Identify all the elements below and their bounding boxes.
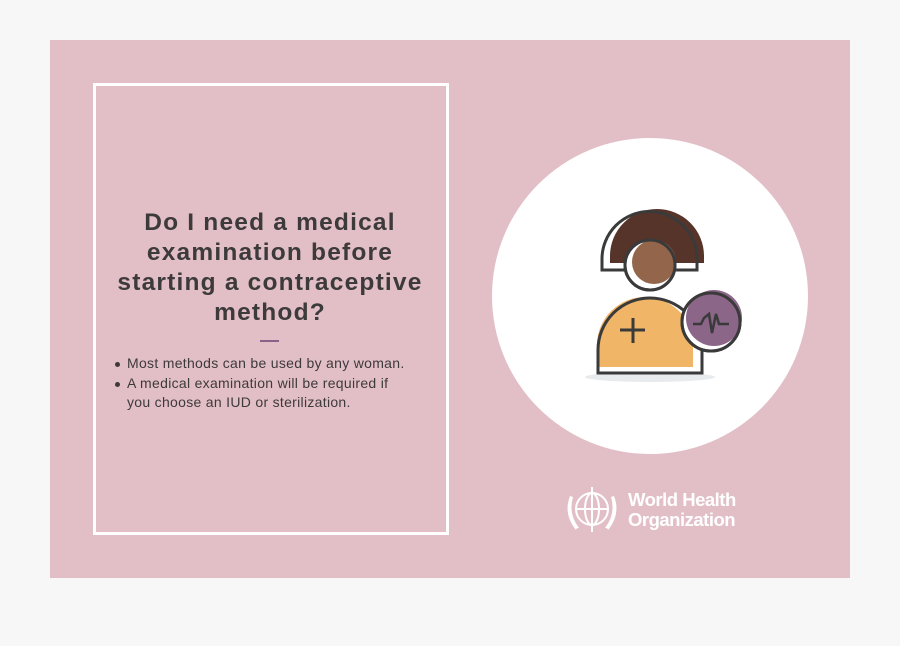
white circle <box>492 138 808 454</box>
logo: WHO: Organization <box>628 509 735 530</box>
title: Do I need a medical examination before starting a contraceptive method? <box>117 209 423 326</box>
bullet list: A medical examination will be required if you choose an IUD or sterilization. <box>127 374 388 410</box>
logo: WHO: World Health <box>628 489 736 510</box>
bullet list: Most methods can be used by any woman. <box>127 355 405 371</box>
bullet list <box>115 355 405 410</box>
frame box <box>93 83 449 535</box>
panel: background <box>50 40 850 578</box>
logo: WHO <box>568 487 736 532</box>
accent dash <box>260 340 279 342</box>
